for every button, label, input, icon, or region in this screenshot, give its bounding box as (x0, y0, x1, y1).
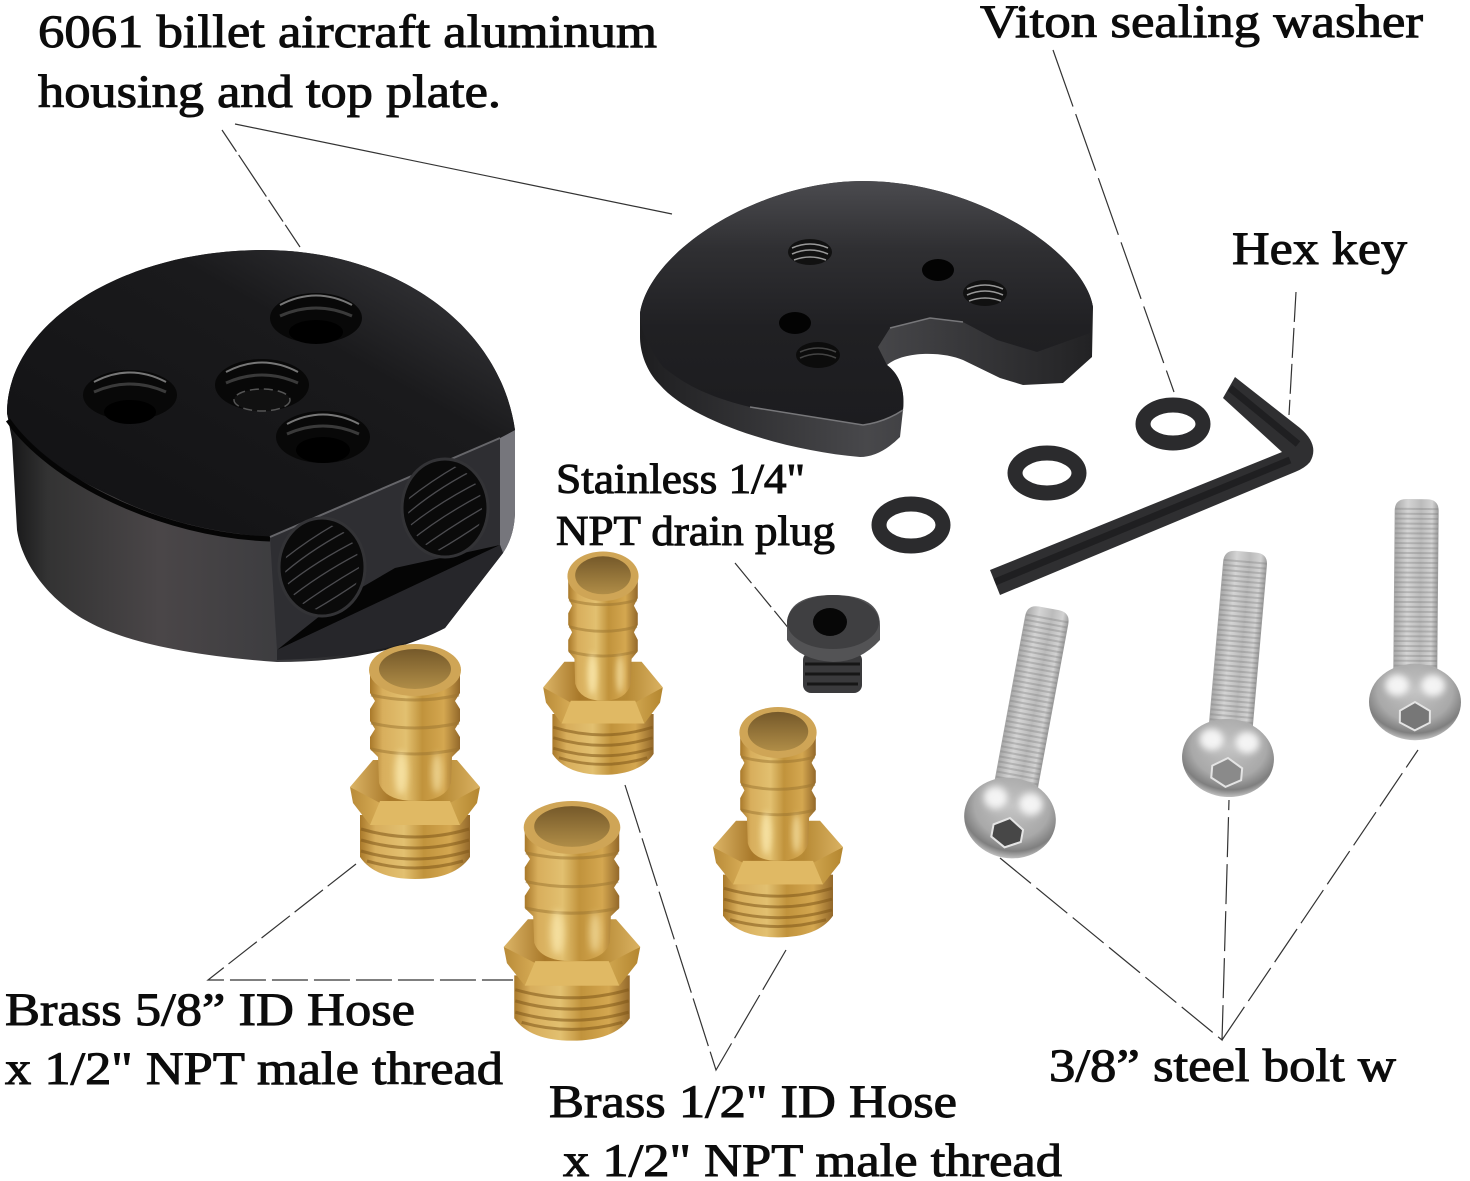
icon: steel bolts (957, 499, 1463, 866)
text: drain plug label: NPT drain plug (556, 509, 835, 555)
leader: drain plug (735, 563, 790, 630)
flat port face (270, 438, 500, 650)
text: drain plug label: Stainless 1/4" (556, 457, 805, 503)
plate silhouette wall (640, 181, 1093, 457)
fitting: left (350, 644, 480, 879)
bolt: left (957, 600, 1094, 866)
plate top face (640, 181, 1093, 425)
fitting: right (713, 707, 843, 937)
fitting: bottom (504, 801, 640, 1041)
text: 5/8 hose label: x 1/2" NPT male thread (5, 1043, 503, 1095)
text: 1/2 hose label (549, 1076, 1062, 1181)
leader: housing (222, 130, 300, 247)
icon: top plate (640, 181, 1093, 457)
leader lines (208, 50, 1418, 1070)
text: 1/2 hose label: Brass 1/2" ID Hose (549, 1076, 957, 1128)
text: 5/8 hose label: Brass 5/8” ID Hose (5, 984, 415, 1036)
bolt: right (1369, 499, 1463, 741)
leader: 5/8 hose (208, 864, 513, 980)
leader: 1/2 hose (625, 785, 786, 1070)
counterbore holes (270, 293, 362, 344)
title: housing and top plate label: housing and top plate. (38, 66, 501, 118)
chamfer (277, 545, 500, 650)
icon: aluminum housing (7, 250, 515, 662)
leader: washer (1053, 50, 1174, 392)
icon: drain plug (787, 595, 880, 693)
icon: hex key (990, 377, 1313, 595)
text: steel bolt label: 3/8” steel bolt w (1049, 1040, 1396, 1092)
leader: top plate (235, 124, 672, 214)
text: Hex key label: Hex key (1232, 223, 1408, 275)
bolt: middle (1179, 548, 1292, 801)
title: housing and top plate label (38, 6, 657, 118)
fitting: top (543, 552, 663, 775)
title: housing and top plate label: 6061 billet aircraft aluminum (38, 6, 657, 58)
leader: hex key (1289, 292, 1296, 415)
right edge strip (500, 430, 515, 553)
icon: washers (879, 405, 1203, 546)
text: 5/8 hose label (5, 984, 503, 1095)
leader: bolts (1000, 750, 1418, 1040)
plate holes (788, 239, 832, 265)
text: drain plug label (556, 457, 835, 555)
top face (7, 250, 515, 537)
housing body (7, 250, 515, 662)
icon: brass fittings (350, 552, 843, 1041)
threaded ports (279, 515, 365, 619)
